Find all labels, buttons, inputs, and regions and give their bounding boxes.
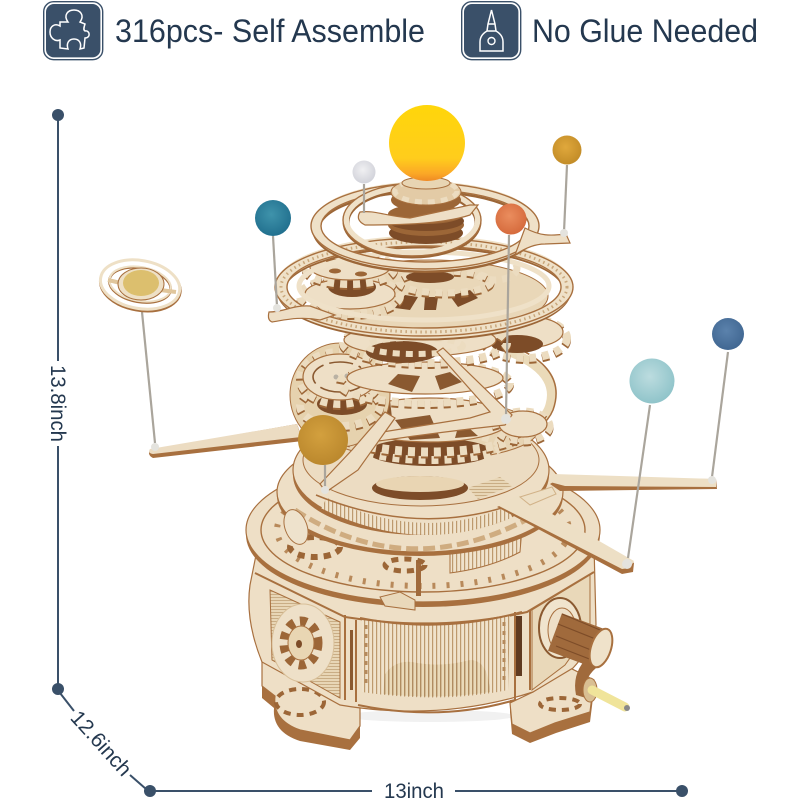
- base: large music disc: [246, 458, 600, 610]
- dimension: depth 12.6inch: [60, 693, 146, 789]
- dimension: height 13.8inch: 13.8inch: [46, 365, 69, 442]
- planet: Saturn disc with rings: [97, 254, 184, 317]
- sun stand: stacked wooden discs: [388, 204, 464, 244]
- icon: glue bottle: [462, 2, 521, 60]
- label: 316pcs- Self Assemble: 316pcs- Self Assemble: [115, 13, 425, 49]
- gears: left pair: [290, 343, 390, 447]
- arm: Saturn support arm: [149, 424, 303, 458]
- arm: right lower arm for Uranus: [497, 487, 634, 574]
- panel: front slats: [345, 610, 530, 712]
- base: body: [249, 545, 596, 712]
- planet: dark blue: [712, 318, 744, 350]
- base: top tier with slatted band: [293, 410, 549, 535]
- planet: yellow: [552, 136, 582, 164]
- dimension: depth 12.6inch: 12.6inch: [66, 706, 136, 781]
- ring: large graduated orbit with teal planet arm: [268, 238, 573, 336]
- label: No Glue Needed: No Glue Needed: [532, 13, 758, 49]
- planet: red-orange: [496, 204, 526, 234]
- badge: 316pcs self assemble: [44, 2, 425, 60]
- planet: white moon: [352, 160, 376, 184]
- icon: puzzle piece: [44, 2, 103, 60]
- crank: knob cylinder and handle: [555, 614, 630, 711]
- ring: outer top orbit with yellow planet arm: [311, 183, 570, 269]
- planet: gold: [298, 415, 348, 465]
- arm: star bracket to red planet: [320, 348, 512, 492]
- panel: left medallion: [270, 590, 340, 698]
- dimension: height 13.8inch: [46, 109, 69, 695]
- ring: inner top orbit with white planet arm: [343, 184, 481, 256]
- planet: teal: [255, 200, 291, 236]
- planet: pale blue: [630, 358, 674, 404]
- wooden orrery model: [97, 105, 744, 750]
- gears: upper layer inside ring: [300, 254, 548, 332]
- panel: right side: [532, 575, 590, 690]
- planet: sun: [389, 105, 465, 181]
- gears: lower middle layer: [322, 345, 556, 466]
- dimension: width 13inch: [144, 780, 688, 800]
- gears: central plate and right gear: [340, 316, 567, 405]
- badge: no glue needed: [462, 2, 758, 60]
- planet rods: [142, 165, 728, 569]
- base: second tier with triangle track: [277, 432, 563, 556]
- sun stand: gear topper: [391, 177, 461, 212]
- base: feet: [262, 660, 594, 750]
- arm: right upper arm for Neptune: [550, 474, 717, 491]
